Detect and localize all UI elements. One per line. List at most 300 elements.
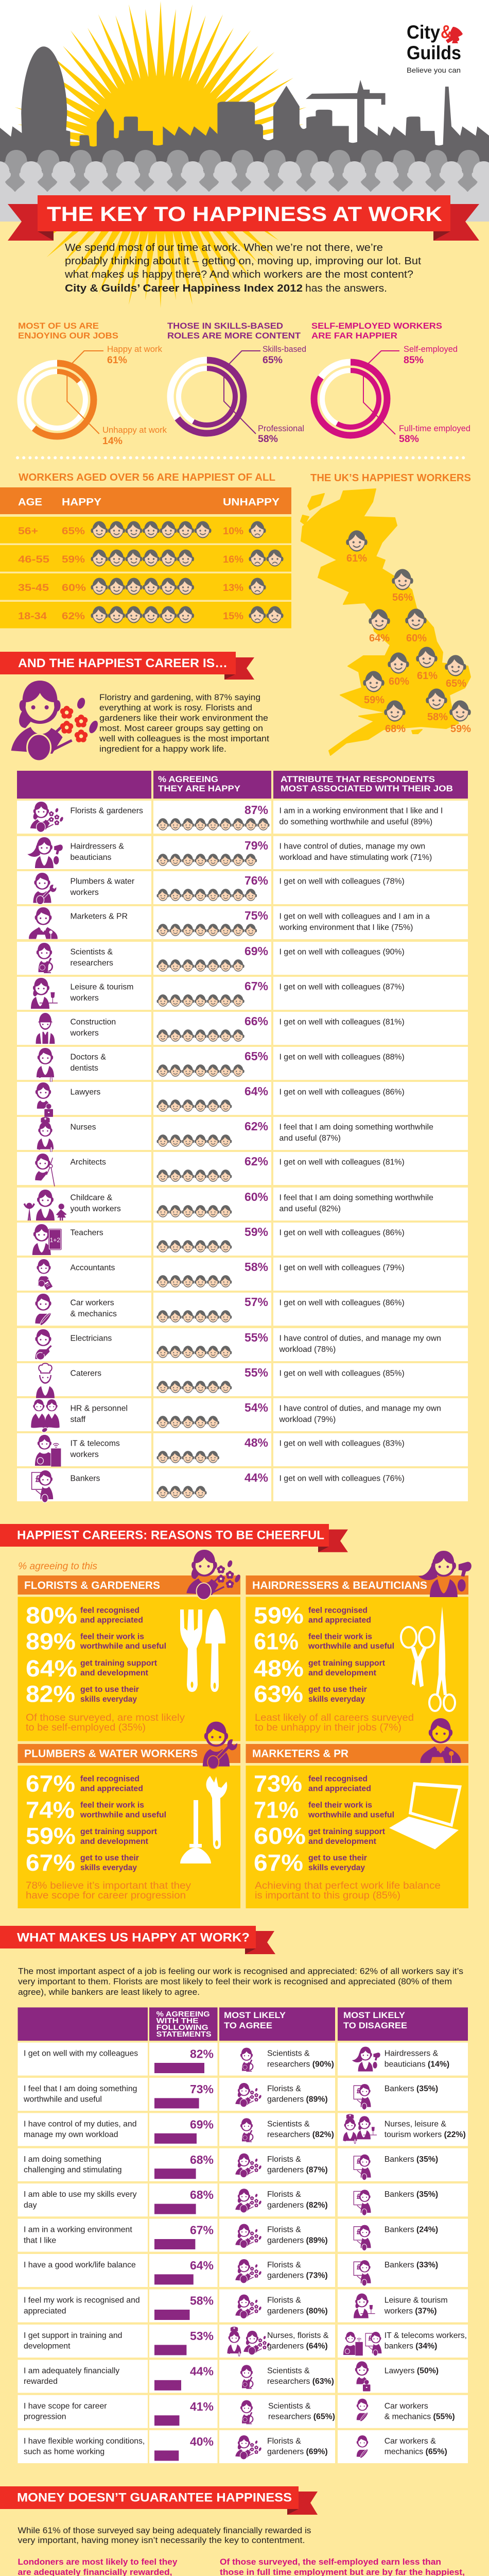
row: car workers and mechanics: 57%	[244, 1295, 268, 1309]
panel: most of us enjoy our jobs: Unhappy at work	[102, 425, 167, 435]
panel: florists and gardeners: 89%	[26, 1629, 76, 1655]
row: bankers	[17, 1468, 468, 1502]
panel: plumbers and water workers: feel their work is	[80, 1801, 144, 1810]
row: get on well 82%	[18, 2043, 468, 2076]
table header	[17, 771, 468, 799]
row: training 53%: 53%	[190, 2329, 214, 2343]
map marker: East 65%	[445, 655, 466, 689]
logo: City & Guilds: Believe you can	[407, 66, 461, 74]
panel: florists and gardeners: feel recognised	[80, 1606, 139, 1615]
row: get on well 82%: beauticians (14%)	[385, 2060, 449, 2069]
panel: skills-based roles: Professional	[258, 423, 304, 433]
text: floristry description	[99, 692, 269, 754]
row: skills 68%: £	[357, 2193, 361, 2201]
row: age 56+	[0, 517, 291, 543]
row: financially rewarded 44%: Lawyers (50%)	[385, 2366, 439, 2375]
panel: florists and gardeners	[18, 1550, 241, 1741]
row: age 35-45: 60%	[62, 583, 86, 594]
row: environment 67%: I am in a working environment	[24, 2226, 132, 2234]
text: floristry description: everything at work is rosy. Florists and	[99, 703, 252, 713]
callout: self-employed	[219, 2557, 465, 2576]
map marker: West Midlands 60%	[388, 652, 409, 687]
row: architects: Architects	[70, 1158, 106, 1166]
row: challenging 68%: Bankers (35%)	[385, 2155, 438, 2164]
row: hairdressers and beauticians: I have control of duties, manage my own	[279, 842, 425, 851]
intro text: has the answers.	[305, 283, 387, 294]
row: age 18-34: 15%	[223, 611, 243, 622]
row: bankers: Bankers	[70, 1475, 100, 1483]
row: recognised 58%: Florists &	[267, 2296, 301, 2305]
panel: marketers and PR: 73%	[254, 1771, 302, 1797]
section banner: money does not guarantee happiness: MONEY DOESN’T GUARANTEE HAPPINESS	[17, 2490, 292, 2505]
panel: most of us enjoy our jobs: ENJOYING OUR JOBS	[18, 331, 118, 341]
intro text: We spend most of our time at work. When we’re not there, we’re	[65, 242, 383, 253]
panel: plumbers and water workers: worthwhile and useful	[80, 1810, 166, 1820]
panel: marketers and PR: and development	[308, 1837, 376, 1846]
panel: skills-based roles: Skills-based	[263, 344, 306, 354]
map marker: Yorkshire 60%: 60%	[406, 633, 427, 644]
map marker: North West 64%: 64%	[369, 633, 390, 644]
row: challenging 68%: challenging and stimulating	[24, 2165, 122, 2174]
table header	[18, 2007, 468, 2041]
panel: skills-based roles: 65%	[263, 355, 283, 366]
panel: marketers and PR: feel recognised	[308, 1775, 368, 1784]
panel: age table: HAPPY	[62, 497, 102, 508]
row: skills 68%: day	[24, 2201, 37, 2210]
row: plumbers and water workers: Plumbers & water	[70, 877, 134, 886]
row: doctors and dentists: Doctors &	[70, 1053, 106, 1061]
row: worthwhile 73%: £	[357, 2087, 361, 2095]
panel: plumbers and water workers	[18, 1722, 240, 1908]
donut chart: happy 61%, unhappy 14%	[21, 351, 103, 436]
row: childcare and youth workers: youth workers	[70, 1205, 121, 1213]
panel: self-employed workers: 85%	[404, 355, 424, 366]
row: environment 67%: 67%	[190, 2224, 214, 2237]
row: accountants: Accountants	[70, 1263, 115, 1273]
city skyline	[0, 46, 489, 177]
row: childcare and youth workers: 60%	[244, 1190, 268, 1204]
row: recognised 58%: 58%	[190, 2294, 214, 2308]
map marker: North East 56%: 56%	[392, 592, 413, 603]
row: car workers and mechanics	[17, 1293, 468, 1327]
row: car workers and mechanics: I get on well with colleagues (86%)	[279, 1298, 405, 1308]
row: skills 68%: 68%	[190, 2188, 214, 2201]
row: get on well 82%: researchers (90%)	[267, 2060, 334, 2069]
section banner: what makes us happy at work: WHAT MAKES US HAPPY AT WORK?	[17, 1931, 250, 1945]
row: challenging 68%: Florists &	[267, 2155, 301, 2164]
panel: florists and gardeners: to be self-employed (35%)	[26, 1722, 146, 1733]
row: age 56+: 65%	[62, 526, 85, 537]
panel: UK map of happiest workers: THE UK’S HAPPIEST WORKERS	[310, 472, 471, 484]
row: electricians: 55%	[244, 1331, 268, 1344]
row: age 35-45: 13%	[223, 583, 243, 594]
row: hairdressers and beauticians	[17, 836, 468, 869]
panel: marketers and PR: feel their work is	[308, 1801, 372, 1810]
panel: florists and gardeners: Of those surveyed, are most likely	[26, 1712, 185, 1723]
row: lawyers: Lawyers	[70, 1088, 100, 1096]
panel: florists and gardeners: skills everyday	[80, 1695, 137, 1704]
row: age 18-34	[0, 602, 291, 629]
panel: plumbers and water workers: 67%	[26, 1850, 75, 1876]
row: challenging 68%: I am doing something	[24, 2155, 101, 2164]
row: worthwhile 73%: 73%	[190, 2082, 214, 2096]
row: control 69%: I have control of my duties, and	[24, 2120, 137, 2128]
icon: sun	[0, 0, 330, 324]
row: skills 68%: I am able to use my skills every	[24, 2190, 137, 2199]
table: happiest careers	[17, 771, 468, 1502]
row: environment 67%: that I like	[24, 2236, 56, 2245]
intro text: probably thinking about it – getting on, moving up, improving our lot. But	[65, 256, 421, 267]
row: environment 67%: gardeners (89%)	[267, 2236, 328, 2245]
text: floristry description: Floristry and gardening, with 87% saying	[99, 692, 260, 702]
panel: most of us enjoy our jobs: 61%	[107, 355, 127, 366]
row: age 35-45	[0, 573, 291, 600]
crowd silhouettes	[0, 150, 489, 222]
panel: plumbers and water workers: get to use their	[80, 1854, 139, 1862]
row: teachers: 1+2	[50, 1236, 60, 1244]
row: HR and personnel staff: 54%	[244, 1401, 268, 1414]
panel: florists and gardeners: 80%	[26, 1602, 77, 1629]
row: nurses	[17, 1117, 468, 1153]
row: teachers: Teachers	[70, 1228, 103, 1238]
row: electricians: Electricians	[70, 1334, 112, 1343]
table header: MOST LIKELY	[343, 2010, 406, 2020]
row: electricians	[17, 1328, 468, 1361]
section banner: what makes us happy at work	[0, 1926, 275, 1954]
panel: hairdressers and beauticians: get to use their	[308, 1685, 367, 1694]
row: marketers and PR: 75%	[244, 909, 268, 922]
row: financially rewarded 44%	[18, 2360, 468, 2393]
row: get on well 82%: 82%	[190, 2047, 214, 2061]
row: childcare and youth workers: I feel that I am doing something worthwhile	[279, 1193, 433, 1202]
row: financially rewarded 44%: Scientists &	[267, 2366, 310, 2375]
row: IT and telecoms workers	[17, 1433, 468, 1467]
text: money paragraph: While 61% of those surveyed say being adequately financially rewarded is	[18, 2526, 311, 2535]
map marker: London 58%	[426, 688, 448, 723]
row: florists and gardeners: Florists & gardeners	[70, 807, 143, 815]
row: work-life balance 64%: 64%	[190, 2259, 214, 2272]
row: worthwhile 73%	[18, 2078, 468, 2111]
row: flexible working 40%: 40%	[190, 2435, 214, 2448]
panel: plumbers and water workers: 74%	[26, 1797, 75, 1823]
label: percent agreeing: % agreeing to this	[18, 1561, 98, 1572]
intro text	[64, 242, 421, 294]
row: nurses: and useful (87%)	[279, 1134, 341, 1143]
row: recognised 58%: gardeners (80%)	[267, 2307, 328, 2315]
row: lawyers: 64%	[244, 1084, 268, 1098]
row: worthwhile 73%: Bankers (35%)	[385, 2084, 438, 2093]
row: age 46-55: 59%	[62, 554, 85, 565]
row: hairdressers and beauticians: 79%	[244, 839, 268, 852]
panel: plumbers and water workers: get training support	[80, 1827, 157, 1836]
panel: hairdressers and beauticians: worthwhile and useful	[308, 1642, 394, 1651]
panel: plumbers and water workers: and appreciated	[80, 1785, 143, 1793]
row: leisure and tourism workers: 67%	[244, 979, 268, 993]
map marker: North West 64%	[369, 609, 390, 644]
panel: most of us enjoy our jobs: MOST OF US ARE	[18, 321, 99, 331]
row: caterers	[17, 1363, 468, 1398]
row: plumbers and water workers: 76%	[244, 874, 268, 887]
icon: scissors	[401, 1606, 455, 1711]
table header: MOST ASSOCIATED WITH THEIR JOB	[281, 784, 453, 793]
text: money paragraph: very important, having money isn’t necessarily the key to contentment.	[18, 2536, 305, 2545]
row: skills 68%: Florists &	[267, 2190, 301, 2199]
panel: florists and gardeners: FLORISTS & GARDENERS	[24, 1580, 160, 1591]
row: training 53%: I get support in training and	[24, 2331, 122, 2340]
panel: most of us enjoy our jobs: Happy at work	[107, 344, 162, 354]
table header: TO AGREE	[224, 2021, 272, 2030]
panel: hairdressers and beauticians: Least likely of all careers surveyed	[255, 1712, 414, 1723]
intro text: what makes us happy there? And which workers are the most content?	[64, 269, 413, 280]
row: worthwhile 73%: I feel that I am doing something	[24, 2084, 137, 2093]
title banner: THE KEY TO HAPPINESS AT WORK	[47, 203, 442, 226]
map marker: South East 59%: 59%	[450, 723, 471, 735]
map marker: Scotland 61%	[346, 530, 368, 564]
row: construction workers: I get on well with colleagues (81%)	[279, 1018, 405, 1026]
map marker: South East 59%	[449, 700, 471, 735]
panel: marketers and PR: Achieving that perfect work life balance	[255, 1880, 441, 1891]
text: job aspects paragraph	[18, 1967, 463, 1997]
section banner: money does not guarantee happiness	[0, 2486, 318, 2515]
row: control 69%: researchers (82%)	[267, 2130, 334, 2139]
row: environment 67%	[18, 2219, 468, 2252]
intro text: City & Guilds’ Career Happiness Index 2012	[65, 283, 303, 294]
map: Great Britain	[301, 489, 470, 755]
row: scientists and researchers	[17, 942, 468, 975]
panel: plumbers and water workers: 67%	[26, 1771, 75, 1797]
panel: skills-based roles: 58%	[258, 434, 278, 445]
map marker: Wales 59%	[363, 671, 385, 706]
row: recognised 58%: I feel my work is recognised and	[24, 2296, 140, 2305]
row: worthwhile 73%: gardeners (89%)	[267, 2095, 328, 2104]
row: car workers and mechanics: Car workers	[70, 1298, 114, 1308]
icon: wrench and plunger	[180, 1776, 227, 1863]
header illustration: sun, skyline and crowd	[0, 0, 489, 324]
icon: fork and trowel	[180, 1609, 225, 1692]
row: career progression 41%: Scientists &	[268, 2402, 311, 2411]
row: age 46-55	[0, 545, 291, 572]
row: get on well 82%: Hairdressers &	[385, 2049, 439, 2058]
donut chart: skills-based 65%, professional 58%	[170, 351, 260, 434]
row: work-life balance 64%: gardeners (73%)	[267, 2272, 328, 2280]
row: plumbers and water workers: workers	[70, 888, 99, 897]
panel: marketers and PR	[246, 1718, 468, 1908]
panel: UK map of happiest workers	[301, 472, 471, 755]
panel: self-employed workers	[311, 321, 470, 445]
row: flexible working 40%: Florists &	[267, 2437, 301, 2446]
row: construction workers	[17, 1012, 468, 1045]
row: car workers and mechanics: & mechanics	[70, 1310, 117, 1318]
callout: self-employed: Of those surveyed, the self-employed earn less than	[220, 2557, 441, 2567]
panel: self-employed workers: SELF-EMPLOYED WORKERS	[311, 321, 442, 331]
row: flexible working 40%: mechanics (65%)	[385, 2448, 447, 2456]
section banner: reasons to be cheerful	[0, 1524, 348, 1552]
row: hairdressers and beauticians: Hairdressers &	[70, 842, 124, 851]
row: accountants: I get on well with colleagues (79%)	[279, 1263, 405, 1273]
row: scientists and researchers: I get on well with colleagues (90%)	[279, 948, 405, 956]
row: bankers: I get on well with colleagues (76%)	[279, 1475, 405, 1483]
row: financially rewarded 44%: researchers (63%)	[267, 2377, 334, 2386]
row: control 69%: manage my own workload	[24, 2130, 118, 2139]
panel: hairdressers and beauticians: HAIRDRESSERS & BEAUTICIANS	[252, 1580, 427, 1591]
row: control 69%: 69%	[190, 2117, 214, 2131]
map marker: Scotland 61%: 61%	[346, 553, 367, 564]
row: career progression 41%: 41%	[190, 2400, 214, 2413]
panel: hairdressers and beauticians: 61%	[254, 1629, 299, 1655]
panel: marketers and PR: skills everyday	[308, 1863, 365, 1872]
row: career progression 41%: & mechanics (55%)	[385, 2412, 455, 2421]
row: training 53%: gardeners (64%)	[267, 2342, 328, 2351]
row: childcare and youth workers: Childcare &	[70, 1193, 113, 1202]
row: training 53%: bankers (34%)	[385, 2342, 437, 2351]
panel: plumbers and water workers: 78% believe it’s important that they	[26, 1880, 191, 1891]
panel: age table	[0, 472, 291, 629]
table header: % AGREEING	[158, 775, 218, 784]
panel: hairdressers and beauticians: and development	[308, 1669, 376, 1677]
row: electricians: workload (78%)	[279, 1345, 336, 1354]
map marker: East Midlands 61%	[416, 647, 438, 682]
panel: self-employed workers: ARE FAR HAPPIER	[311, 331, 397, 341]
row: teachers	[17, 1223, 468, 1256]
text: floristry description: gardeners like their work environment the	[99, 713, 268, 723]
panel: florists and gardeners: and development	[80, 1669, 148, 1677]
panel: hairdressers and beauticians: and appreciated	[308, 1616, 371, 1624]
row: construction workers: Construction	[70, 1018, 116, 1026]
table header: THEY ARE HAPPY	[158, 784, 240, 793]
panel: hairdressers and beauticians: skills everyday	[308, 1695, 365, 1704]
row: control 69%: Scientists &	[267, 2120, 310, 2128]
panel: age table: AGE	[18, 497, 42, 508]
map marker: South West 68%: 68%	[385, 723, 406, 735]
row: skills 68%: gardeners (82%)	[267, 2201, 328, 2210]
row: marketers and PR: working environment that I like (75%)	[279, 923, 413, 932]
icon: hairdresser figure	[418, 1551, 471, 1597]
table header: FOLLOWING	[156, 2024, 208, 2032]
row: marketers and PR	[17, 906, 468, 939]
row: nurses: I feel that I am doing something worthwhile	[279, 1123, 433, 1131]
row: nurses: Nurses	[70, 1123, 96, 1131]
row: financially rewarded 44%: I am adequately financially	[24, 2366, 119, 2375]
row: challenging 68%	[18, 2148, 468, 2181]
row: age 46-55: 46-55	[18, 554, 50, 565]
table header: TO DISAGREE	[343, 2021, 407, 2030]
row: HR and personnel staff	[17, 1398, 468, 1433]
map marker: East 65%: 65%	[446, 678, 466, 689]
map marker: West Midlands 60%: 60%	[389, 676, 409, 687]
panel: marketers and PR: 60%	[254, 1823, 306, 1849]
panel: self-employed workers: Full-time employed	[399, 423, 470, 433]
row: worthwhile 73%: Florists &	[267, 2084, 301, 2093]
row: training 53%: Nurses, florists &	[267, 2331, 329, 2340]
row: environment 67%: Florists &	[267, 2226, 301, 2234]
panel: marketers and PR: get training support	[308, 1827, 385, 1836]
row: HR and personnel staff: workload (79%)	[279, 1415, 336, 1424]
icon: laptop	[389, 1782, 462, 1850]
logo: City & Guilds: City	[407, 22, 440, 43]
row: training 53%: IT & telecoms workers,	[385, 2331, 467, 2340]
row: career progression 41%	[18, 2395, 468, 2428]
row: plumbers and water workers	[17, 871, 468, 905]
row: get on well 82%: Scientists &	[267, 2049, 310, 2058]
row: hairdressers and beauticians: beauticians	[70, 853, 112, 862]
row: challenging 68%: 68%	[190, 2153, 214, 2166]
row: bankers: £	[36, 1473, 41, 1484]
icon: florist figure	[186, 1550, 241, 1600]
panel: hairdressers and beauticians: feel their work is	[308, 1632, 372, 1641]
row: age 18-34: 18-34	[18, 611, 47, 622]
row: lawyers	[17, 1082, 468, 1117]
row: marketers and PR: Marketers & PR	[70, 912, 128, 921]
text: floristry description: most. Most career groups say getting on	[99, 723, 263, 733]
row: skills 68%: Bankers (35%)	[385, 2190, 438, 2199]
row: lawyers: I get on well with colleagues (86%)	[279, 1088, 405, 1096]
row: doctors and dentists: I get on well with colleagues (88%)	[279, 1053, 405, 1061]
row: IT and telecoms workers: 48%	[244, 1436, 268, 1449]
row: doctors and dentists	[17, 1047, 468, 1083]
row: plumbers and water workers: I get on well with colleagues (78%)	[279, 877, 405, 886]
icon: large florist	[11, 681, 99, 761]
row: florists and gardeners: do something worthwhile and useful (89%)	[279, 818, 432, 826]
panel: florists and gardeners: 82%	[26, 1681, 75, 1707]
row: electricians: I have control of duties, and manage my own	[279, 1334, 441, 1343]
row: flexible working 40%: gardeners (69%)	[267, 2448, 328, 2456]
panel: florists and gardeners: feel their work is	[80, 1632, 144, 1641]
row: age 56+: 56+	[18, 526, 38, 537]
panel: self-employed workers: 58%	[399, 434, 419, 445]
row: architects: 62%	[244, 1155, 268, 1168]
text: floristry description: well with colleagues is the most important	[99, 734, 269, 743]
row: flexible working 40%	[18, 2430, 468, 2463]
row: challenging 68%: gardeners (87%)	[267, 2165, 328, 2174]
row: IT and telecoms workers: I get on well with colleagues (83%)	[279, 1439, 405, 1448]
table header: ATTRIBUTE THAT RESPONDENTS	[281, 775, 435, 784]
row: environment 67%: £	[357, 2228, 361, 2236]
row: leisure and tourism workers: I get on well with colleagues (87%)	[279, 983, 405, 991]
row: career progression 41%: I have scope for career	[24, 2402, 107, 2411]
row: challenging 68%: £	[357, 2158, 361, 2166]
row: doctors and dentists: dentists	[70, 1064, 98, 1073]
text: job aspects paragraph: The most important aspect of a job is feeling our work is recognised and appreciated: 62% of all workers say it’s	[18, 1967, 463, 1976]
panel: plumbers and water workers: skills everyday	[80, 1863, 137, 1872]
row: financially rewarded 44%: rewarded	[24, 2377, 58, 2386]
row: environment 67%: Bankers (24%)	[385, 2226, 438, 2234]
icon: plumber figure	[203, 1722, 237, 1769]
panel: age table: WORKERS AGED OVER 56 ARE HAPPIEST OF ALL	[19, 472, 275, 483]
row: control 69%	[18, 2113, 468, 2146]
row: childcare and youth workers: and useful (82%)	[279, 1205, 341, 1213]
panel: skills-based roles	[167, 321, 306, 445]
map marker: South West 68%	[384, 700, 406, 735]
text: job aspects paragraph: very important to them. Florists are most likely to feel their work is recognised and appreciated (80% of them	[18, 1977, 452, 1987]
map marker: London 58%: 58%	[427, 711, 448, 723]
panel: age table: UNHAPPY	[223, 497, 280, 508]
row: work-life balance 64%: Florists &	[267, 2261, 301, 2269]
row: work-life balance 64%: £	[357, 2263, 361, 2272]
row: worthwhile 73%: worthwhile and useful	[23, 2095, 102, 2104]
row: accountants	[17, 1258, 468, 1291]
panel: florists and gardeners: worthwhile and useful	[80, 1642, 166, 1651]
panel: plumbers and water workers: 59%	[26, 1823, 76, 1849]
row: teachers: 59%	[244, 1225, 268, 1239]
section banner: and the happiest career is: AND THE HAPPIEST CAREER IS…	[18, 656, 228, 670]
row: work-life balance 64%	[18, 2254, 468, 2287]
panel: skills-based roles: ROLES ARE MORE CONTENT	[167, 331, 301, 341]
panel: marketers and PR: get to use their	[308, 1854, 367, 1862]
section banner: reasons to be cheerful: HAPPIEST CAREERS: REASONS TO BE CHEERFUL	[17, 1528, 324, 1543]
row: flexible working 40%: Car workers &	[385, 2437, 436, 2446]
row: financially rewarded 44%: 44%	[190, 2364, 214, 2378]
panel: plumbers and water workers: have scope for career progression	[26, 1890, 186, 1901]
